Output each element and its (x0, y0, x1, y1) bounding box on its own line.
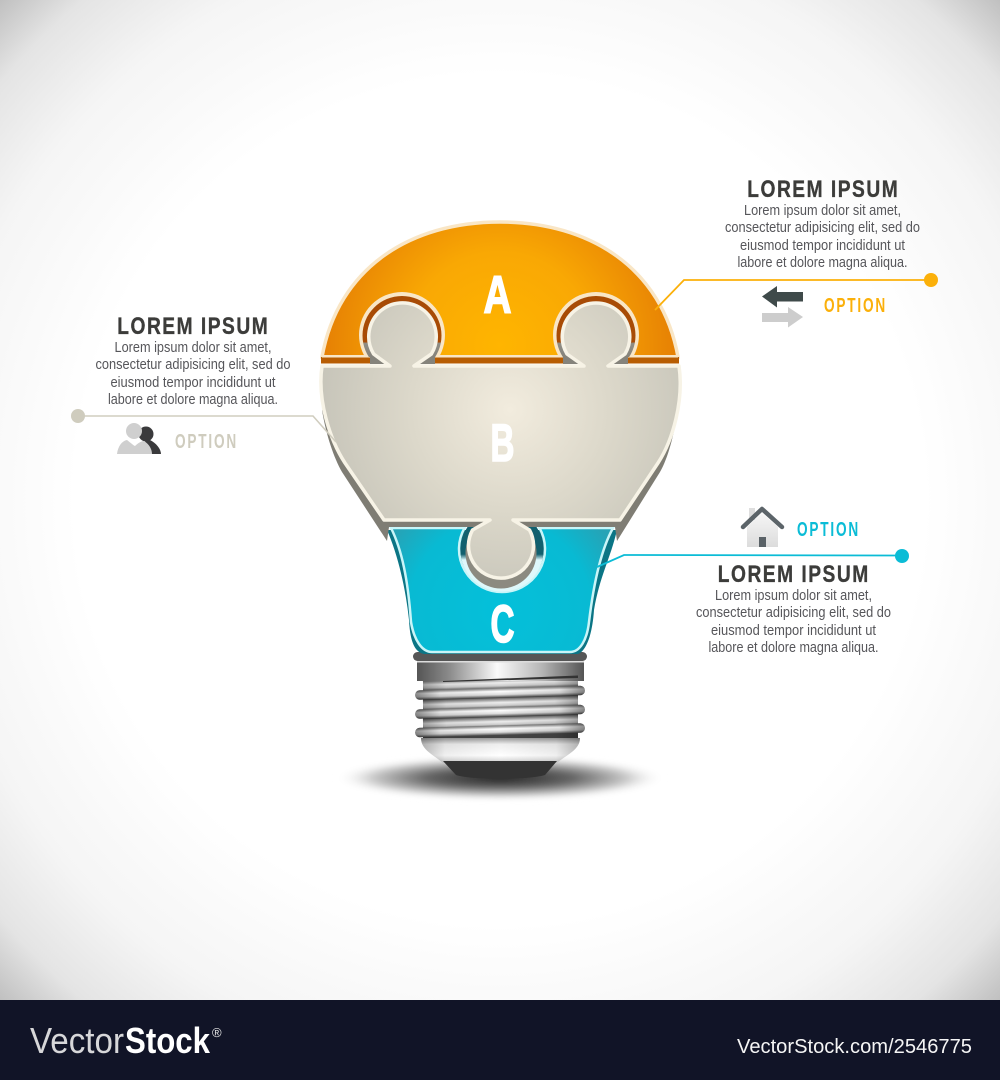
option label B: OPTION (175, 430, 236, 453)
body text A (725, 203, 920, 271)
footer logo (30, 1020, 222, 1061)
body text C: labore et dolore magna aliqua. (708, 640, 878, 656)
letter C: C (490, 595, 514, 654)
body text B: Lorem ipsum dolor sit amet, (114, 340, 272, 356)
icon: people (117, 423, 161, 454)
body text B (96, 340, 290, 408)
letter B: B (490, 414, 514, 473)
option label A: OPTION (824, 294, 885, 317)
piece C: cyan (387, 508, 617, 654)
piece B: grey (321, 303, 680, 578)
body text C: eiusmod tempor incididunt ut (711, 623, 876, 639)
body text B: consectetur adipisicing elit, sed do (96, 357, 290, 373)
icon: house (743, 508, 782, 547)
body text C (696, 588, 891, 656)
footer url: VectorStock.com/2546775 (737, 1036, 972, 1058)
footer logo: ® (212, 1025, 222, 1040)
body text C: consectetur adipisicing elit, sed do (696, 605, 891, 621)
heading A: LOREM IPSUM (747, 175, 898, 203)
icon: arrows (762, 286, 803, 328)
leader line A (655, 273, 938, 310)
light bulb (321, 222, 680, 779)
piece A: orange (321, 222, 679, 378)
callout: B, left (71, 312, 336, 454)
callout: C, bottom right (597, 508, 909, 656)
leader line C (597, 549, 909, 567)
option label C: OPTION (797, 518, 858, 541)
heading B: LOREM IPSUM (117, 312, 268, 340)
footer logo: Vector (30, 1020, 124, 1061)
body text B: labore et dolore magna aliqua. (108, 392, 278, 408)
footer logo: Stock (125, 1020, 211, 1061)
letter A: A (484, 266, 512, 325)
footer bar (0, 1000, 1000, 1080)
callout: A, top right (655, 175, 938, 328)
heading C: LOREM IPSUM (718, 560, 868, 588)
bulb ground shadow (335, 756, 665, 800)
leader line B (71, 409, 336, 442)
body text C: Lorem ipsum dolor sit amet, (715, 588, 872, 604)
body text A: labore et dolore magna aliqua. (738, 255, 908, 271)
body text A: eiusmod tempor incididunt ut (740, 238, 905, 254)
body text A: consectetur adipisicing elit, sed do (725, 220, 920, 236)
body text A: Lorem ipsum dolor sit amet, (744, 203, 901, 219)
body text B: eiusmod tempor incididunt ut (110, 375, 276, 391)
screw base (413, 652, 587, 779)
